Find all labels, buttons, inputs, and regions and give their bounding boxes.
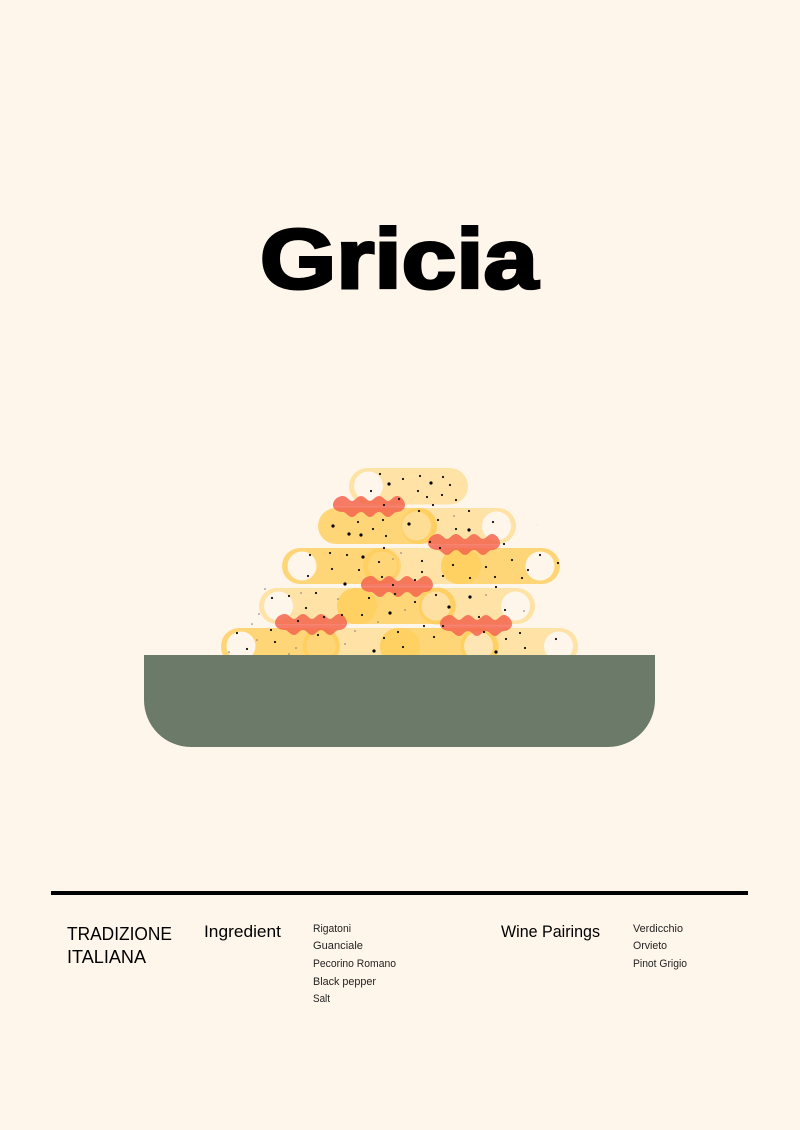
wine list: Orvieto bbox=[633, 940, 667, 952]
illustration: pasta dish bbox=[144, 468, 655, 747]
pasta row 4 bbox=[259, 588, 535, 624]
divider rule bbox=[51, 891, 748, 895]
ingredient list: Pecorino Romano bbox=[313, 958, 396, 970]
bowl bbox=[144, 655, 655, 747]
guanciale pieces bbox=[275, 496, 512, 636]
brand: Tradizione Italiana bbox=[67, 923, 172, 967]
black pepper specks bbox=[229, 474, 558, 654]
ingredient list: Rigatoni bbox=[313, 923, 351, 935]
pasta row 2 bbox=[318, 508, 516, 544]
wine list: Pinot Grigio bbox=[633, 958, 687, 970]
wine list bbox=[633, 923, 687, 970]
wine list: Verdicchio bbox=[633, 923, 683, 935]
ingredient list bbox=[313, 923, 396, 1005]
title: Gricia bbox=[260, 212, 539, 306]
heading: Ingredient: Ingredient bbox=[204, 923, 281, 941]
brand: Tradizione Italiana: TRADIZIONE bbox=[67, 923, 172, 944]
ingredient list: Black pepper bbox=[313, 976, 376, 988]
pasta row 1 bbox=[349, 468, 468, 504]
ingredient list: Salt bbox=[313, 993, 330, 1005]
pasta row 5 bbox=[221, 628, 578, 665]
heading: Wine Pairings: Wine Pairings bbox=[501, 923, 600, 941]
pasta row 3 bbox=[282, 548, 560, 584]
brand: Tradizione Italiana: ITALIANA bbox=[67, 946, 147, 967]
ingredient list: Guanciale bbox=[313, 940, 363, 952]
